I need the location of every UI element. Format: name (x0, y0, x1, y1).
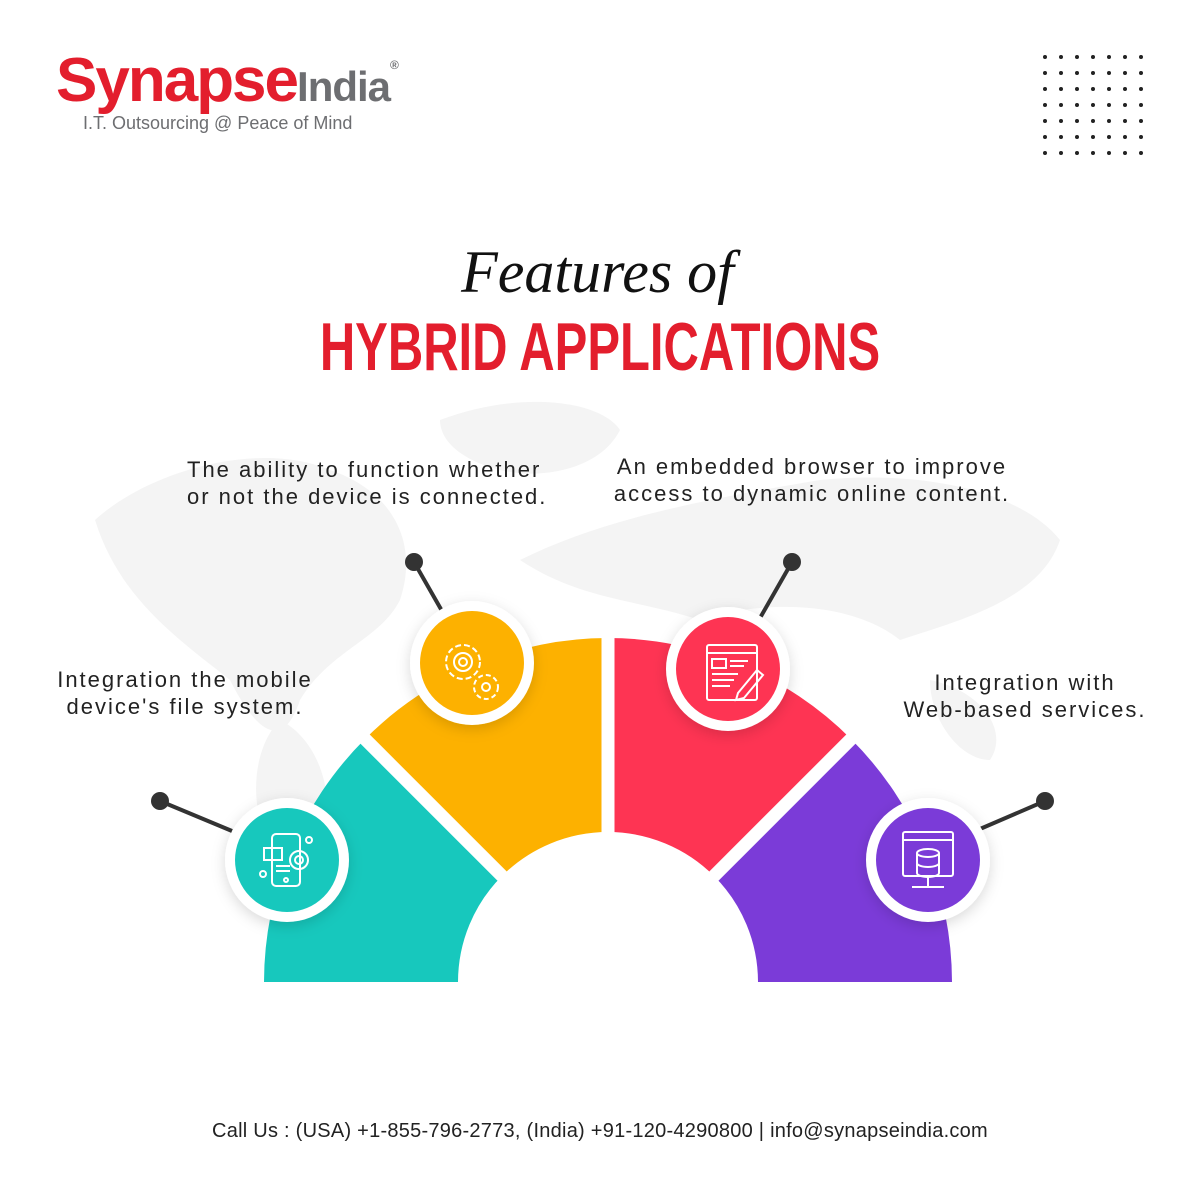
icon: mobile settings (225, 798, 349, 922)
text: embedded browser: An embedded browser to improve (617, 454, 1007, 479)
title (320, 239, 880, 385)
logo: SynapseIndia® (56, 46, 397, 115)
text: offline (187, 457, 547, 509)
text: embedded browser: access to dynamic online content. (614, 481, 1010, 506)
segment: teal (264, 739, 502, 982)
text: file system: device's file system. (67, 694, 303, 719)
segment: red (608, 638, 851, 876)
decorative dot grid (1043, 55, 1143, 155)
segment: purple (714, 739, 952, 982)
footer contact: Call Us : (USA) +1-855-796-2773, (India) +91-120-4290800 | info@synapseindia.com (212, 1120, 988, 1142)
text: offline: The ability to function whether (187, 457, 541, 482)
title: HYBRID APPLICATIONS (320, 309, 880, 385)
text: offline: or not the device is connected. (187, 484, 547, 509)
icon: browser edit (666, 607, 790, 731)
logo: I.T. Outsourcing @ Peace of Mind (83, 113, 352, 133)
icon: gears (410, 601, 534, 725)
text: web services: Integration with (934, 670, 1116, 695)
segment: yellow (365, 638, 608, 876)
text: web services (903, 670, 1146, 722)
text: file system: Integration the mobile (57, 667, 313, 692)
text: embedded browser (614, 454, 1010, 506)
text: web services: Web-based services. (903, 697, 1146, 722)
icon: web database (866, 798, 990, 922)
connector lines (160, 562, 1045, 831)
title: Features of (461, 239, 734, 305)
text: file system (57, 667, 313, 719)
